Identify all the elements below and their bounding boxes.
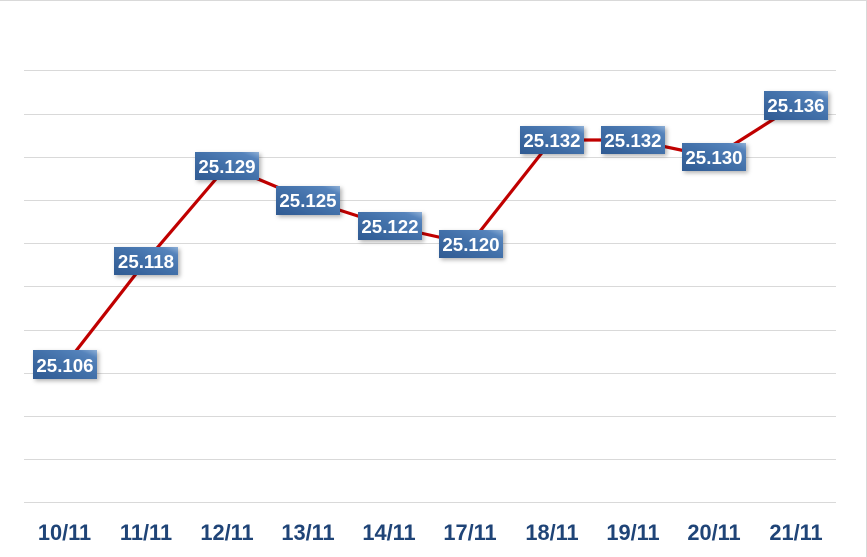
label: 18/11 value	[520, 126, 584, 154]
label: 19/11 value	[601, 126, 665, 154]
label: 20/11 value	[682, 143, 746, 171]
x axis date labels: 17/11	[443, 520, 497, 545]
x axis date labels: 18/11	[525, 520, 579, 545]
label: 20/11 value: 25.130	[685, 147, 743, 168]
label: 12/11 value: 25.129	[198, 156, 256, 177]
x axis date labels	[38, 520, 823, 545]
label: 19/11 value: 25.132	[604, 130, 662, 151]
x axis date labels: 12/11	[200, 520, 254, 545]
data labels	[33, 91, 828, 379]
x axis date labels: 10/11	[38, 520, 91, 545]
label: 11/11 value: 25.118	[118, 251, 174, 272]
label: 21/11 value: 25.136	[767, 95, 825, 116]
data line	[65, 105, 796, 365]
label: 12/11 value	[195, 152, 259, 180]
label: 14/11 value	[358, 212, 422, 240]
label: 14/11 value: 25.122	[361, 216, 419, 237]
x axis date labels: 19/11	[606, 520, 660, 545]
x axis date labels: 21/11	[769, 520, 823, 545]
label: 10/11 value: 25.106	[36, 355, 94, 376]
x axis date labels: 13/11	[281, 520, 335, 545]
label: 11/11 value	[114, 247, 178, 275]
x axis date labels: 11/11	[120, 520, 172, 545]
label: 18/11 value: 25.132	[523, 130, 581, 151]
x axis date labels: 14/11	[362, 520, 416, 545]
label: 13/11 value: 25.125	[279, 190, 337, 211]
label: 17/11 value: 25.120	[442, 234, 500, 255]
x axis date labels: 20/11	[687, 520, 741, 545]
label: 21/11 value	[764, 91, 828, 120]
label: 17/11 value	[439, 230, 503, 258]
label: 10/11 value	[33, 350, 97, 379]
label: 13/11 value	[276, 186, 340, 215]
